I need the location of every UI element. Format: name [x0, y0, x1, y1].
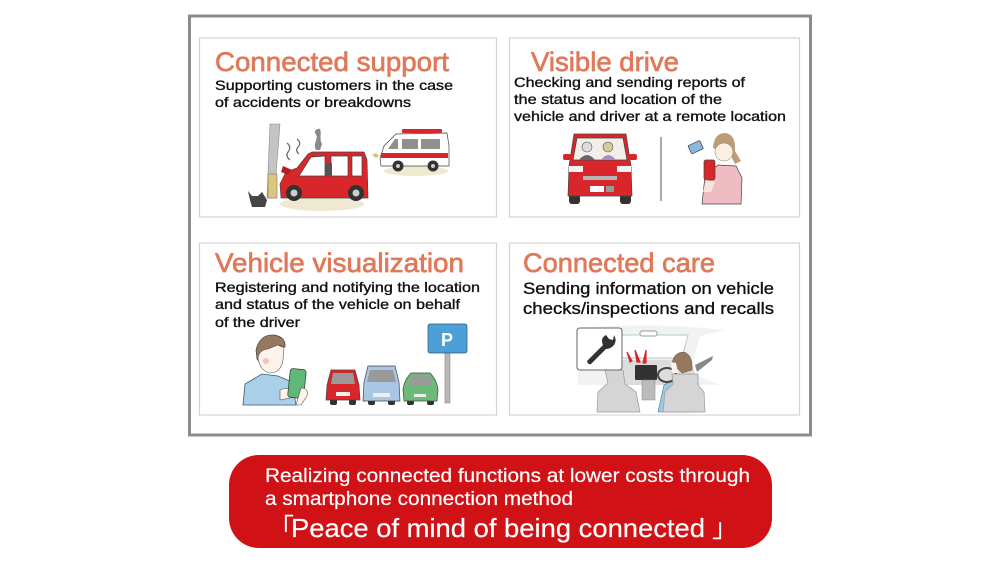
panel: connected care	[510, 243, 800, 415]
text: connected support description: Supporting customers in the case	[215, 77, 453, 93]
text: connected care description	[523, 279, 774, 318]
illustration: three parked cars	[326, 366, 438, 405]
text: visible drive description: the status and location of the	[514, 91, 722, 107]
panel: connected support	[200, 38, 496, 217]
text: vehicle visualization description: of the driver	[215, 314, 300, 330]
divider between car and woman	[660, 137, 662, 201]
heading: connected support: Connected support	[215, 47, 450, 77]
icon: parking sign: P	[441, 330, 453, 350]
text: connected support description: of accidents or breakdowns	[215, 94, 411, 110]
illustration: car interior with driver	[577, 325, 725, 412]
text: vehicle visualization description: Registering and notifying the location	[215, 279, 480, 295]
text: vehicle visualization description	[215, 279, 480, 330]
text: vehicle visualization description: and status of the vehicle on behalf	[215, 296, 460, 312]
heading: vehicle visualization: Vehicle visualization	[215, 248, 464, 278]
callout: peace of mind banner	[229, 455, 772, 548]
text: smartphone connection method	[265, 466, 750, 510]
text: peace of mind slogan: 」	[712, 513, 738, 543]
illustration: woman with smartphone	[688, 133, 742, 204]
illustration: car front with two occupants	[563, 134, 637, 204]
icon: parking sign	[428, 324, 467, 403]
text: connected care description: checks/inspections and recalls	[523, 299, 774, 318]
panel: vehicle visualization	[200, 243, 496, 415]
panel: visible drive	[510, 38, 800, 217]
text: smartphone connection method: a smartphone connection method	[265, 489, 573, 510]
text: visible drive description	[514, 74, 786, 124]
heading: visible drive: Visible drive	[531, 47, 679, 77]
text: visible drive description: Checking and sending reports of	[514, 74, 745, 90]
text: connected support description	[215, 77, 453, 110]
heading: connected care: Connected care	[523, 248, 715, 278]
text: visible drive description: vehicle and driver at a remote location	[514, 108, 786, 124]
text: smartphone connection method: Realizing connected functions at lower costs through	[265, 466, 750, 487]
illustration: crashed car and ambulance	[248, 124, 449, 211]
text: peace of mind slogan: 「	[268, 513, 294, 543]
illustration: man with smartphone	[243, 335, 307, 405]
text: peace of mind slogan: Peace of mind of being connected	[291, 513, 705, 543]
outer frame	[190, 16, 810, 435]
text: connected care description: Sending information on vehicle	[523, 279, 774, 298]
